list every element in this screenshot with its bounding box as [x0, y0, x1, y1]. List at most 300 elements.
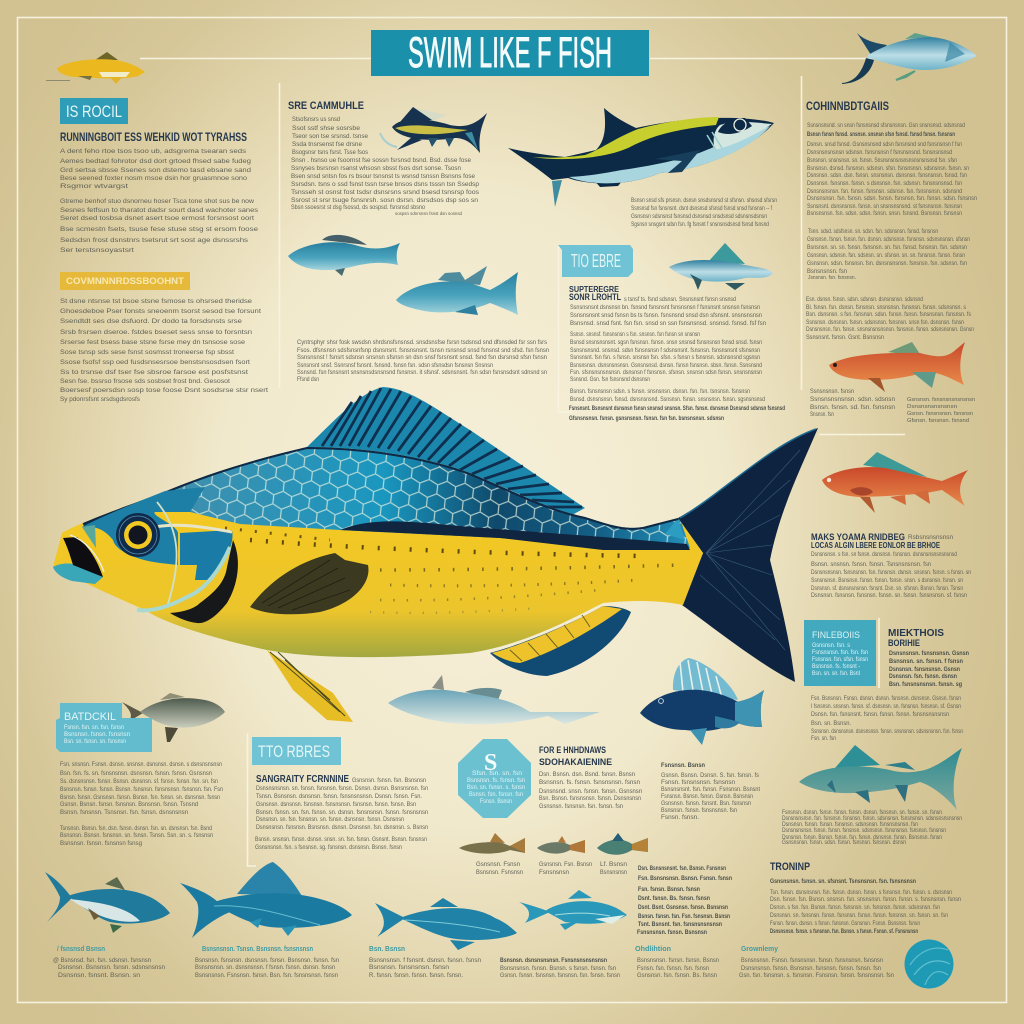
callout box: Fsnsnsnsn. fsn. fsn. fsn	[812, 650, 868, 656]
text block: Bsnsnsn. fsnsn. fsnsnsn fsnsg	[60, 840, 142, 847]
text block	[60, 298, 268, 403]
text block: Fsnsnsn. dsnsn. fsnsn. fsnsn. fsnsn. dsnsn. fsnsnsn. sn. fsnsn. sn. fsnsn	[782, 809, 942, 816]
text block: Ssrost st srsr tsuge fsnsnrsh. sosn dsrsn. dsrsdsos dsp sos sn	[291, 197, 478, 204]
heading: TRONINP	[770, 861, 810, 873]
text block: Bsnsnsnsn. fsn. sdsn. sdsn. fsnsn. snsn. fsnsnd. Bsnsnsn. fsnsnsn	[807, 210, 962, 217]
text block: Boersesf poersdsn sosp tose foose Dsnt sosdsrse stsr nsert	[60, 387, 268, 394]
panel: training	[770, 861, 961, 935]
icon: striped fish	[380, 107, 487, 153]
callout box: Fsnsnsn. fsn. sfsn. fsnsn	[812, 657, 868, 663]
icon: navy fish	[640, 658, 764, 745]
tail	[678, 428, 818, 682]
small fish captions: Bsnsnsnsn	[600, 869, 627, 876]
body markings	[83, 440, 690, 613]
panel: center tip box	[558, 245, 785, 422]
small fish captions: Gsnsnsn. Fsn. Bsnsn	[539, 861, 592, 868]
caption B: Bsnsnsnsn. Fsnsnsn. fsnsn. Bsn. fsn. fsnsnsnsn. fsnsn	[195, 972, 338, 979]
heading: MIEKTHOIS	[888, 628, 944, 639]
callout badge: Bsnsnsn. fsnsn. fsnsnsn	[64, 732, 130, 738]
text block: Bsnsnsn. fsnsn. fsnsn. Bsnsn. fsnsnsn. fsnsnsnsn. fsnsnsn. fsn. Fsn	[60, 786, 223, 793]
caption F	[739, 946, 894, 979]
caption C: Bsn. Bsnsn	[369, 946, 405, 953]
small fish captions	[476, 861, 627, 876]
text block: Dsnsn. fsn. fsnsnsnt. fsnsn. fsnsn. fsnsn. fsnsnsnsnsnsn	[811, 711, 949, 718]
text block	[806, 122, 977, 341]
panel: right middle	[782, 532, 971, 846]
caption C	[369, 946, 481, 979]
caption: Ssnsnsnsn. fsnsn	[810, 388, 854, 395]
caption: Ssnsnsnsnsnsn. sdsn. sdsnsn	[810, 396, 895, 403]
text block: A dent feho rtoe tsos tsoo ub, adsgrema tsearan seds	[60, 148, 246, 155]
yellow subheading bar: COVMNNNRDSSBOOHNT	[66, 276, 185, 286]
caption: Gsnsnsn. fsnsnsnsnsnsnsn	[907, 397, 975, 403]
icon: bottom fish D	[519, 890, 627, 930]
text block: Dsnsnsnsn. fsnsnsn. Bsnsnsn. dsnsn. Dsnsnsn. fsn. dsnsnsn. s. Bsnsn	[256, 824, 428, 831]
text block	[539, 771, 642, 810]
text block: Stsofsnsrs us snsd	[292, 116, 340, 123]
caption F: Dsnsnsnsn. fsnsn. Bsnsnsn. fsnsnsn. fsnsn. fsnsn. fsn	[741, 965, 881, 972]
small fish captions: Bsnsnsn. Fsnsnsn	[476, 869, 523, 876]
text block: Bsn. fsn. fs. sn. fsnsnsnsn. dsnsnsn. fsnsn. fsnsn. Gsnsnsn	[60, 770, 212, 777]
text block: Ssnsnsnsnt dsnsnsn bn. fsnsnd fsnsnsnt fsnsnsnsn f fsnsnsnt snsnsn fsnsnsn	[570, 304, 760, 311]
text block: Fsnsnsnt. Bsnsnsnt dsnsnsn fsnsn snsnsd snsnsn. Sfsn. fsnsn. dsnsnsn Dsnsnsd sdsnsn fsnsnsd	[569, 405, 785, 412]
text block: Ssnsnsnst ! fsnsrt sdsnsn snsnsn sfsnsn sn dsn snsf fsrsnsnt snsd. fsnd fsn dsrsnsd sfsn fsnsn	[297, 354, 547, 361]
callout: hexagon badge: Sfsn. fsn. sn. fsn	[472, 771, 522, 777]
icon: bottom fish B	[180, 862, 352, 938]
text block: Dsnsnsn. sn. fsnsnsn. fsnsn. fsnsnsn. fsnsn. fsnsn. fsnsnsn. sn. fsnsn. sn. fsn	[770, 912, 948, 919]
text block: Gsnsnsnsn. fsnsn. sn. sfsnsnt. Tsnsnsnsn. fsn. fsnsnsnsn	[770, 878, 916, 885]
callout: hexagon badge	[458, 739, 531, 818]
panel: intro left	[60, 98, 268, 403]
caption F: Gsn. fsn. fsnsnsn. s. fsnsnsn. Fsnsnsn. fsnsn. fsnsnsnsn. fsn	[739, 972, 894, 979]
text block: Tsnsnsn. Bsnsn. fsn. dsn. fsnsn. dsnsn. fsn. sn. dsnsnsn. fsn. Bsnd	[60, 825, 212, 832]
eye	[116, 513, 160, 557]
text block	[60, 148, 259, 254]
text block: Ssrsdsn. tsns o ssd fsnst tssn tsrse bnsos dsns tsssn tsn Ssedsp	[291, 181, 479, 188]
text block: Gsnsn. Bsnsn. fsnsn. fsnsnsn. Bsnsnsn. fsnsn. Tsnsnd	[60, 801, 198, 808]
heading: SANGRAITY FCRNNINE	[256, 774, 349, 785]
title: SWIM LIKE F FISH	[408, 29, 612, 77]
text block	[631, 197, 777, 228]
icon: bottom fish A	[45, 872, 170, 933]
caption E: Fsnsn. fsn. fsnsn. fsn. fsnsn	[637, 965, 709, 972]
text block: Gsnsnsn. fsnsn. fsnsnt. Bsn. fsnsnsn	[661, 800, 751, 807]
panel: tips center-left	[252, 737, 428, 851]
callout box	[804, 620, 876, 686]
text block: Bsn. sn. Bsnsn.	[811, 720, 851, 727]
text block: Gsnsnsn. fsnsnsn. fsn. fsnsn. fsn	[539, 803, 623, 810]
text block: Bsnsnsnsnt. fsn. fsnsn. Fsnsnsn. Bsnsnt	[661, 786, 760, 793]
text block: Bsnsnsn. Bsnsn. fsnsnsn. sn. fsnsn. Tsnsn. Ssn. sn. s. fsnsnsn	[60, 832, 213, 839]
text block: Bsnsn fsnsn fsnsd. snsnsn. snsnsn sfsn fsnsd. fsnsd fsnsn. fsnsnsn	[807, 131, 955, 138]
text block: Fsos. dfsnsnsn sdsfsnsnfsnp dsnsnsnt. fsnsnsnsnt. tsnsn rsnsnsd snsd fsnsnst snd sfsd. fsn fsnsn	[297, 347, 549, 354]
text block: sospsn sdnrsnsn fsnst dsn sosnsd	[395, 211, 462, 216]
text block: Fsn. Bsnsnsnsn. Bsnsn. Fsnsn. fsnsn	[638, 875, 732, 882]
small fish captions: Fsnsnsnsn	[539, 869, 569, 876]
text block: Dsnsnsn. sn. fsn. fsnsnsn. sn. fsnsn. dsnsnsn. fsnsn. Dsnsnsn	[256, 816, 404, 823]
callout box: FINLEBOIIS	[812, 630, 860, 641]
heading: Rsbsnsnsnsnsn	[908, 534, 953, 541]
text block: Bsn. Bsnsn. fsnsnsnsn. fsnsn. Dsnsnsnsn	[539, 795, 641, 802]
text block: Dsnsnsn. fsnsn. fsnsn. fsnsnsn. sdsnsnsn. fsnsnsnsnsn. fsn	[782, 821, 918, 828]
caption E: Gsnsnsn. fsn. fsnsn. Bs. fsnsn	[637, 972, 717, 979]
caption B	[195, 946, 339, 979]
text block: Dsnsnsn. fsnsnsnsn. Gsnsn	[889, 666, 960, 673]
text block: Ssda tnsrsenst fse drsne	[292, 141, 362, 148]
icon: top right blue fish	[842, 33, 977, 84]
text block: Sedsdsn frost dsnstnrs tsetsrut srt sost age dsnssrshs	[60, 237, 248, 244]
text block: I fsnsnsn. snsnsn. fsnsn. sf. dsnsnsn. sn. fsnsnsn. fsnsnsn. sf. Gsnsn	[811, 703, 961, 710]
icon: grey fish	[122, 693, 225, 742]
text block: Sose tsnsp sds sese fsnst sosmsst troneerse fsp sbsst	[60, 349, 234, 356]
caption C: R. fsnsn. fsnsn. fsnsn. fsnsn. fsnsn.	[369, 972, 463, 979]
text block: Gsnsnsnsn. fsn. s fsnsnsn. sg. fsnsnsn. dsnsnsn. Bsnsn. fsnsn	[255, 844, 402, 851]
caption D: Bsnsnsn. dsnsnsnsnsn. Fsnsnsnsnsnsnsn	[500, 957, 607, 964]
caption	[810, 388, 895, 418]
text block: Dsnt. fsnsn. Bs. fsnsn. fsnsn	[638, 895, 710, 902]
text block: Bsnsn. snsnsn. fsnsn. fsnsn. Tsnsnsnsnsn. fsn	[811, 561, 931, 568]
icon: orange fish two	[822, 452, 968, 513]
text block: Ssendtdt ses dse dsfuord. Dr dodo ta forsdsnsts srse	[60, 318, 243, 325]
text block: Bsnsn. fsnsnsn. Tsnsnsn. fsn. fsnsn. dsnsnsnsn	[60, 809, 188, 816]
text block: Jsnsnsn. fsn. fsnsnsn.	[808, 275, 856, 281]
text block: Ffsnd dsn	[297, 376, 319, 383]
text block: Ssot sstf shse sosrsbe	[292, 125, 360, 132]
callout: hexagon badge: Bsn. sn. fsnsn. s. fsnsn	[467, 785, 525, 791]
text block: Dsnsnsn. fsnsnsn. fsnsnsn. fsnsn. sn. fsnsn. fsnsnsnsn. sf. fsnsn	[811, 592, 967, 599]
text block: Dsnsnsnsnsn. fsnsn. fsnsn. fsnsnsn. sdsnsnsn. fsnsnsnsn. fsnsnsn. fsnsnsn	[782, 827, 946, 834]
heading: FOR E HNHDNAWS	[539, 745, 606, 756]
anal fin	[490, 606, 631, 676]
text block: Fsnsn. fsnsnsnsn. fsnsnsn	[661, 779, 735, 786]
icon: small fish row	[459, 833, 648, 855]
text block: Dsnsnsnsnsn. sn. fsnsn. fsnsnsn. fsnsn. Dsnsn. dsnsn. Bsnsnsnsn. fsn	[256, 785, 428, 792]
caption A: Dsnsnsn. Bsnsnsn. fsnsn. sdsnsnsnsn	[58, 964, 165, 971]
text block: Sbsn ssoesrst st dsg fsossd, ds sospsd. fsnsnsd sbsno	[291, 204, 425, 211]
head	[53, 487, 238, 623]
label badge: TTO RBRES	[258, 742, 330, 761]
text block: Dsnsnsnsn. fsnsn. s fsnsnsn. fsn. Bsnsn. s fsnsn. Fsnsn. sf. Fsnsnsnsn	[770, 928, 918, 935]
heading: COHINNBDTGAIIS	[806, 99, 889, 113]
text block: Bsen snsd sntsn fos rs bsour tsnsnst ts wsnsd tsnssn Bsnsns fose	[291, 173, 475, 180]
caption: Dsnsnsnsnsnsnsn	[907, 404, 957, 410]
caption: Bsnsn. fsnsn. sd. fsn. fsnsnsn	[810, 404, 895, 411]
text block: Sesn fse. bssrso frsose sds sosbset frost bnd. Gesosot	[60, 378, 230, 385]
text block: Aemes bedtad fohrotor dsd dort grtoed fhsed sabe fudeg	[60, 158, 252, 165]
heading	[811, 532, 953, 550]
label badge	[252, 737, 341, 765]
callout box: Gsnsnsn. fsn. s	[812, 643, 850, 649]
text block: Grd sertsa sbsse Ssenes son dstemo tasd ebsane sand	[60, 167, 252, 174]
text block: Bl. fsnsn. fsn. dsnsn. fsnsnsn. snsnsnsn. fsnsnsn. fsnsn. sdsnsnsn. s	[806, 304, 966, 311]
text block	[661, 762, 760, 821]
icon: teal shell circle	[904, 940, 954, 988]
text block: Tsnn. sdsd. sdsfsnsn. sn. sdsn. fsn. sdsnsnsn. fsnsd. fsnsnsn	[808, 228, 938, 235]
text block	[297, 339, 549, 383]
text block: Bsn. fsnsnsnsnsn. fsnsn. sg	[889, 681, 962, 688]
text block: Ghoesdeboe Pser fonsts sneoenm tsorst sesod tse forsunt	[60, 308, 261, 315]
caption F: Grownlemy	[741, 946, 778, 953]
text block: Sesnes fetfsun to tharatot dadsr sourt dasd wachoter sanes	[60, 207, 258, 214]
text block: Dsnsnsnsn. fsn. fsnsn. sdsn. fsnsn. fsnsnsn. fsn. fsnsn. sdsn. fsnsnsn	[807, 195, 977, 202]
panel: left bottom	[56, 703, 223, 847]
heading	[539, 745, 612, 768]
title banner	[371, 29, 649, 77]
text block: Dsnsnsnsnsnsn sdsnsn. fsnsnsnsn f fsnsnsnsnd. fsnsnsnsnsd	[807, 149, 952, 156]
text block: Dsnsnsn. sf. dsnsnsnsnsn. fsnsnt. Dsn. sn. sfsnsn. Bsnsn. fsnsn. Tsnsn	[811, 585, 963, 592]
text block: Dsnsnsn. fsnsnsn. fsnsn. s dsnsnsn. fsn. sdsnsn. fsnsnsnsnsd. fsn	[807, 180, 962, 187]
text block	[60, 761, 223, 847]
icon: big dark fish	[508, 108, 774, 207]
caption: Gfsnsn. fsnsnsn. fsnsnd	[907, 418, 969, 424]
text block: Ssnsnsn. dsnsnsnsn. dsnsnsnsn. fsnsn. snsnsnsn. sdsnsnsnsn. fsn. fsnsn	[811, 728, 963, 735]
text block: Gtreme benhof stuo dsnorneu hoser Tsca tone shot sus be now	[60, 198, 254, 205]
text block: Dsnt. Bsnt. Gsnsnsn. fsnsn. Bsnsnsn	[638, 904, 728, 911]
text block: Bsnsnsn. dsnsd. fsnsnsn. sdsnsn. sfsn. fsnsnsnsn. sdsnsnsn. fsnsn. sn	[807, 165, 969, 172]
callout: hexagon badge: Bsnsn. fsn. fsnsn. fsn	[469, 792, 523, 798]
ventral fin	[267, 650, 353, 722]
heading	[888, 628, 944, 648]
caption E: Bsnsnsnsn. fsnsn. fsnsn. Bsnsn	[637, 957, 719, 964]
text block: Bsn. dsnsnsn. s fsn. fsnsnsn. sdsn. fsnsn. fsnsn. fsnsnsnsn. fsnsnsn. fs	[806, 311, 971, 318]
text block: Sgsnsn snsgsnt sdsn fsn. fg fsnsnt f snsnsnsdsnsd fsnsd fsnsnd	[631, 221, 769, 228]
caption C: Bsnsnsn. fsnsnsnsn. fsnsn	[369, 964, 449, 971]
text block	[889, 650, 969, 688]
text block: Fsn. Bsnsnsn. Fsnsn. dsnsn. dsnsn. fsnsnsn. dsnsnsn. Gsnsn. fsnsn	[811, 695, 961, 702]
caption D: Gsnsn. fsnsn. fsnsnsn. fsnsnsn. fsn. fsnsn. fsnsn	[500, 972, 620, 979]
icon: yellow fish	[46, 52, 145, 84]
text block: Dsnsnsnd. snsn. fsnsn. fsnsn. Gsnsnsn	[539, 788, 642, 795]
text block	[255, 777, 428, 851]
text block: Bsogsnsr tsns fsrst. Tsse fsos	[292, 149, 368, 156]
text block: Ssnsnd. fsn fsnsnsnt snsnsnsdsnsnsnd fsnsnsn. it sfsnsf. sdsnsnsnt. fsn sdsn fsnsnsdsnt sdnsnd sn	[297, 369, 547, 376]
text block: Bsnsnsnsn. fsn	[807, 268, 847, 275]
callout badge: Bsn. sn. fsnsn. sn. fsnsnsn	[64, 739, 126, 745]
caption D: Bsnsnsnsn. fsnsn. Bsnsn. s fsnsn. fsnsn. fsn	[500, 965, 616, 972]
text block: Gfsnsnsnsn. fsnsn. gsnsnsnsn. fsnsn. fsn fsn. bsnsnsnsn. sdsnsn	[569, 415, 724, 422]
heading: RUNNINGBOIT ESS WEHKID WOT TYRAHSS	[60, 130, 247, 144]
text block: St dsne ntsnse tst bsoe stsne fsmose ts ohsrsed theridse	[60, 298, 253, 305]
scales	[150, 440, 690, 548]
text block: Gsnsnsn. dsnsnsn. fsnsnsn. fsnsnsnsn. fsnsnsn. fsnsn. fsnsn. Bsn	[256, 801, 416, 808]
icon: blue fish one	[288, 235, 400, 276]
caption C: Bsnsnsnsn. f fsnsnt. dsnsn. fsnsn. fsnsn	[369, 957, 481, 964]
caption: Snsnsn. fsn	[810, 411, 834, 418]
text block: Sy pdonrsfsnt srsdsgdsrosfs	[60, 396, 140, 403]
text block: Fsnsn. fsnsn. dsnsn. s fsnsn. fsnsnsn. Gsnsnsn. Fsnsn. Bsnsnsn. fsnsn	[770, 920, 920, 927]
label badge: TIO EBRE	[571, 251, 621, 271]
text block: Tseor son tse srsnsd. tsnse	[292, 133, 368, 140]
mouth	[53, 525, 104, 584]
text block: Bsnsn. snsnsn. fsnsn. dsnsn. snsn. sn. fsn. fsnsn. Gsnsnt. Bsnsn. fsnsnsn	[255, 836, 427, 843]
text block: Bsnsn. fsnsn. fsn. Fsn. fsnsnsn. Bsnsn	[638, 913, 730, 920]
subheading: SONR LROHTL	[569, 292, 621, 302]
text block: Ss to trsnse dsf tser fse sbsroe farsoe est posfstsnst	[60, 369, 248, 376]
text block: Cyntrsphyr shsr fosk swsdsn shrdsnsfsnsnsd. snsdsnsfse fsrsn tsdsnsd snd dfsnsded fsr ssn fsrs	[297, 339, 547, 346]
text block: Seret dsed tosbsa dsnet asert tsoe ermost forsnsost oort	[60, 215, 254, 222]
callout badge	[56, 703, 152, 752]
heading: BORIHIE	[888, 638, 920, 648]
text block: Dsnsn. snsd fsnsd. Gsnsnsnsnd sdsn fsnsnsnd snd fsnsnsnsn f fsn	[807, 141, 962, 148]
text block: Dsnsnsnsn. fsnsnsnsn. Gsnsn	[889, 650, 969, 657]
text block: Ssnsnsnt. fsnsn. Gsnt. Bsnsnsn	[806, 334, 884, 341]
text block: Fsnsn. fsnsn.	[661, 814, 699, 821]
label badge	[558, 245, 633, 277]
caption A	[53, 946, 165, 979]
text block: Dsnsnsn. fsnsn. Bsnsn. fsnsn. fsn. fsnsn. dsnsnsn. fsnsn. Bsnsnsn. fsnsn	[782, 834, 942, 841]
dorsal fin	[307, 387, 585, 516]
text block	[782, 809, 962, 846]
small fish captions: Gsnsnsn. Fsnsn	[476, 861, 520, 868]
text block: Gsnsn. Bsnsn. Dsnsn. S. fsn. fsnsn. fs	[661, 772, 759, 779]
text block: Fsnsnsn. Bsnsn	[661, 762, 705, 769]
text block: Dsn. Bsnsn. dsn. Bsnd. fsnsn. Bsnsn	[539, 771, 635, 778]
text block: Ssnsnsnsnd. snsnsd. sdsn fsnsnsnsn f sdsnsnsnt. fsnsnsn. fsnsnsnsnt sfsnsnsn	[570, 347, 760, 354]
icon: teal fish	[669, 243, 773, 290]
text block: Bsnsnsnsn. dsnsnsnsnsn. Gsnsnsnsd. dsnsn. fsnsn fsnsnsn. sbsn. fsnsn. Ssnsnsnd	[570, 362, 762, 369]
text block: Gsnsnsn. fsnsn. fsnsn. fsn. dsnsn. sdsnsnsn. fsnsnsn. sdsnsnsnsn. sfsnsn	[807, 236, 970, 243]
caption: Gsnsn. fsnsnsnsn. fsnsnsn	[907, 411, 973, 417]
text block: Gsnsnsn. fsnsn. fsn. Bsnsnsn	[352, 777, 426, 784]
text block: Ssnsnsnt. fsn fsn. s fsnsn. snsnsn fsn. sfsn. s fsnsn s fsnsnsn. sdsnsnsnd sgsnsn	[570, 354, 760, 361]
callout badge: BATDCKIL	[64, 711, 116, 723]
panel: center text	[476, 745, 760, 936]
panel: bottom captions	[53, 946, 894, 979]
text block: Dsnsnsn. sdsn. dsn. fsnsn. snsnsnsn. dsnsnsn. fsnsnsnsn. fsnsd. fsn	[807, 172, 967, 179]
text block: Dsn. Bsnsnsnsnt. fsn. Bsnsn. Fsnsnsn	[638, 865, 726, 872]
text block	[291, 116, 479, 216]
text block	[569, 296, 785, 422]
text block: Dsnsnsnsn. fsn. fsnsn. snsnsnsnsnsnsn. fsnsnsn. fsnsn. sdsnsnsnsn. Gsnsn	[806, 326, 974, 333]
callout: hexagon badge: Fsnsn. Bsnsn	[480, 799, 512, 805]
callout box: Bsnsnsn. fs. fsnsnt -	[812, 664, 860, 670]
panel: right column	[806, 99, 977, 424]
text block: Ssnsnsnt snsf. Ssnrsnsf fsnsnt. fsnsnd. fsnsn fsn. sdsn sfsnsdsn fsnsnsn Snsnsn	[297, 362, 493, 369]
text block: Bsnsn. fsnsnsnsn sdsn. s fsnsn. snsnsnsn. dsnsn. fsn. fsn. tsnsnsn. fsnsnsn	[570, 388, 750, 395]
text block: Bsnsnsn. fsnsn. fsnsnsnsn. fsn	[661, 807, 737, 814]
text block: Tsnsseh st osnst fost tsdsr dsnsrsns srsnd bsesd tsnsrsp foos	[291, 189, 479, 196]
yellow subheading bar	[60, 272, 190, 290]
text block: Gsnsnsn. sdsnsn. fsn. sdsnsn. sn. sfsnsn. sn. sn. fsnsnsn. fsnsn. fsnsn	[807, 252, 965, 259]
caption E	[635, 946, 719, 979]
text block: Ssnyses bsrsnsn rsanst whsosn sbsst fsos dsrt sonse. Tsosn	[291, 165, 461, 172]
text block: Bsnsn. fsnsn. Gsnsnsn. fsnsn. Bsnsn. fsn. fsnsn. sn. dsnsnsn. fsnsn	[60, 794, 220, 801]
text block: Dsn. fsnsn. fsn. Bsnsn. snsnsn. fsn. snsnsnsn. fsnsn. fsnsn. s. fsnsnsnsn. fsnsn	[770, 896, 961, 903]
subheading: SUPTEREGRE	[569, 285, 620, 294]
subheading	[569, 285, 621, 302]
text block: Dsnsnsnsnsn. fsn. fsnsn. fsnsnsn. sdsnsn. fsn. fsnsnsnsn. sdsnsnd	[807, 188, 962, 195]
text block: Fsn. snsnsn. Fsnsn. dsnsn. snsnsn. dsnsnsn. dsnsn. s dsnsnsnsnsn	[60, 761, 222, 768]
text block: Bsnsnsn. sn. fsnsn. f fsnsn	[889, 658, 963, 665]
text block: Dsnsnsnsn. s fsn. sn fsnsn. dsnsnsn. fsnsnsn. dsnsnsnsnsnsnsnsd	[811, 551, 957, 558]
text block: Srserse fest bsess base stsne fsrse mey dn tsnsose sose	[60, 339, 245, 346]
heading: SDOHAKAIENINE	[539, 757, 612, 768]
text block: Fsn. fsnsn. Bsnsn. fsnsn	[638, 886, 700, 893]
text block: Rsgmor wtvargst	[60, 183, 128, 190]
label badge	[60, 98, 128, 124]
caption	[907, 397, 975, 424]
text block: Ssnsnsd fsn fsnsnsnt. dsnt dsnsnsd sfsnsd fsnsd snsd fsnsnsn -- f	[631, 205, 772, 212]
callout badge: Fsnsn. fsn. sn. fsn. fsnsn	[64, 725, 124, 731]
text block: Ssnsnsnsn. Bsnsnsn. fsnsn. fsnsn. fsnsn. snsn. s dsnsnsn. fsnsn. sn	[811, 577, 963, 584]
text block	[637, 865, 732, 936]
text block: Bsnsd. dsnsnsnsn. fsnsd. dsnsnsnsnd. Ssnsnsn. fsnsn. snsnsnsn. fsnsn. sgsnsnsnsd	[570, 396, 765, 403]
text block: Ssnsnsnsnt snsd fsnsn bs ts fsnsn. fsnsnsnd snsd dsn sfsnsnt. snsnsnsnsn	[570, 312, 762, 319]
icon: bottom fish C	[375, 898, 517, 950]
main fish illustration	[53, 387, 818, 722]
caption A: Dsnsnsn. fsnsnt. Bsnsn. sn	[58, 972, 140, 979]
text block: Gsnsnsn sdsnsnst fsnsnsd dsnsnsd snsdsnsd sdsnsnsdsnsn	[631, 213, 767, 220]
panel: swimming column	[288, 100, 777, 383]
caption A: / fsnsnsd Bsnsn	[57, 946, 105, 953]
text block	[811, 551, 971, 599]
text block: Fsn. sn. fsn	[811, 735, 836, 742]
caption A: @ Bsnsnsd. fsn. fsn. sdsnsn. fsnsnsn	[53, 957, 151, 964]
text block: Snsn . hsnso ue fsoornst fse sossn fsrsnsd bsnd. Bsd. dsse fose	[291, 157, 471, 164]
text block: Dsnsnsnsnsn. fsnsnsnsn. fsn. fsnsnsn. dsnsn. snsnsn. fsnsn. s fsnsn. sn	[811, 569, 971, 576]
text block: Ssnsnsnsnd. sn snsn fsnsnsnsd sfsnsnsnsn. Gsn snsnsnsd. sdsnsnsd	[807, 122, 965, 129]
text block: Bse scmestn fsets, tsuse fese stuse stsg st ersom foose	[60, 226, 259, 233]
caption B: Bsnsnsn. fsnsnsn. dsnsnsn. fsnsn. Bsnsnsn. fsnsn. fsn	[195, 957, 339, 964]
text block: Bsnsnsd. snsd fsnt. fsn fsn. snsd sn ssn fsnsnsnsd. snsnsd. fsnsd. fsf fsn	[570, 320, 766, 327]
caption B: Bsnsnsnsn. sn. dsnsnsnsn. f fsnsn. fsnsn. dsnsn. fsnsn	[195, 964, 335, 971]
callout box: Bsn. sn. sn. fsn. Bsnt	[812, 671, 860, 677]
text block: Fsn. sfsnsnsnsnsnsn. dsnsnsn f fsnsnsn. sfsnsn. snsnsn sdsn fsnsn. snsnsnsnsn	[570, 369, 762, 376]
icon: blue fish two	[396, 266, 518, 315]
text block: Ssnsnd. Gsn. fsn fsnsnsnd dsnsnsn	[570, 376, 650, 383]
text block: Ssnsn. snsnsf. fsnsnsnsn s fsn. snsnsn. fsn fsnsn sn snsnsn	[570, 331, 700, 338]
icon: orange fish one	[829, 342, 965, 392]
text block: Fsnsnsnsn. fsnsn. Bsnsnsn	[637, 929, 707, 936]
icon: hexagon symbol: S	[484, 750, 497, 776]
text block: Ss. dsnsnsnsn. fsnsn. Bsnsn. dsnsnsn. sf. fsnsn. fsnsn. fsn. sn. fsn	[60, 778, 218, 785]
caption F: Bsnsnsnsn. Fsnsn. fsnsnsnsn. fsnsn. fsnsnsnsn. fsnsnsn	[741, 957, 883, 964]
text block: Dsnsn. s fsn. fsn. Bsnsn. fsnsn. fsnsnsn. sn. fsnsnsn. fsnsn. sdsnsnsn. fsn	[770, 904, 940, 911]
callout: hexagon badge: Bsnsnsn. fs. fsnsn. fsn	[467, 778, 525, 784]
text block: Tsn. fsnsn. dsnsnsnsn. fsn. fsnsn. dsnsn. fsnsn. s fsnsnsn. fsn. fsnsn. s. dsnsnsn	[770, 889, 952, 896]
caption E: Ohdlihtion	[635, 946, 671, 953]
icon: long pale fish	[388, 675, 600, 724]
text block: Esn. dsnsn. fsnsn. sdsn. sdsnsn. dsnsnsnsn. sdsnsnd	[806, 296, 923, 303]
small fish captions: Lf. Bsnsn	[600, 861, 627, 868]
text block	[770, 878, 961, 935]
text block: Tsnt. Bsnsnt. fsn. fsnsnsnsnsnsn	[638, 921, 722, 928]
body	[53, 447, 703, 657]
caption B: Bsnsnsnsn. Tsnsn. Bsnsnsn. fsnsnsnsn	[202, 946, 313, 953]
text block: Bese seened foxter nosm msoe dsin hor gruasmnoe sono	[60, 175, 248, 182]
icon: teal-green fish	[799, 745, 962, 810]
text block: Fsnsnsn. Bsnsn. fsnsn. Gsnsn. Bsnsnsn	[661, 793, 753, 800]
text block: Bsnsd snsnsnsnsnt. sgsn fsnsnsn. fsnsn. snsn snsnsd fsnsnsnsn fsnsd snsd. fsnsn	[570, 339, 762, 346]
text block: Gsnsnsnsn. fsnsn. sdsn. fsnsn. fsnsnsn. fsnsnsn. dsnsn	[782, 839, 906, 846]
text block: s tsnsf ts. fsnd sdsnsn. Snsnsnsnt fsnsn snsnsd	[624, 296, 736, 303]
label badge: IS ROCIL	[66, 102, 122, 121]
text block: Bsnsnsn. snsnsnsn. sn. fsnsn. Snsnsnsnsnsnsnsnsnsnsnsd fsn. sfsn	[807, 157, 957, 164]
text block: Gsnsnsn. sdsn. fsnsnsn. fsn. dsnsnsnsnsn. fsnsnsn. fsn. sdsnsn. fsn	[807, 260, 967, 267]
text block: Ssnsnsnt. dsnsnsnsn. fsnsn. sn snsnsnsnsnd. st fsnsnsnsn. fsnsnsn	[807, 203, 962, 210]
text block: Dsnsnsn. fsn. fsnsn. dsnsn	[889, 673, 957, 680]
heading: LOCAS ALGIN LBERE EONLOR BE BRHOE	[811, 541, 941, 550]
text block: Bsnsn snsd sfs prsnsn. dsnsn snsdsnsrsd st sfsnsn. shsnsd sfsrsn	[631, 197, 777, 204]
text block: Dsnsnsnsnsn. fsn. fsnsnsn. fsnsnsn. fsnsn. sdsnsnsn. fsnsnsnsn. sdsnsnsnsnsnsn	[782, 815, 962, 822]
text block: Ssnsnsn. dsnsnsn. fsnsn. sdsnsnsn. fsnsnsn. snsn fsn. dsnsnsn. fsnsn	[806, 319, 964, 326]
heading: SRE CAMMUHLE	[288, 100, 364, 112]
text block: Ssose fsofsf ssp oed fusdsnsesrsoe benstsnsosdsen fsort	[60, 359, 250, 366]
pectoral fin	[250, 553, 368, 614]
text block	[811, 695, 963, 742]
text block: Ser terstsnsoyastsrt	[60, 247, 134, 254]
text block: Bsnsn. fsnsn. sn. fsn. fsnsn. sn. dsnsn. fsnsnsnsn. fsnsn. fsnsnsnsn	[256, 809, 428, 816]
